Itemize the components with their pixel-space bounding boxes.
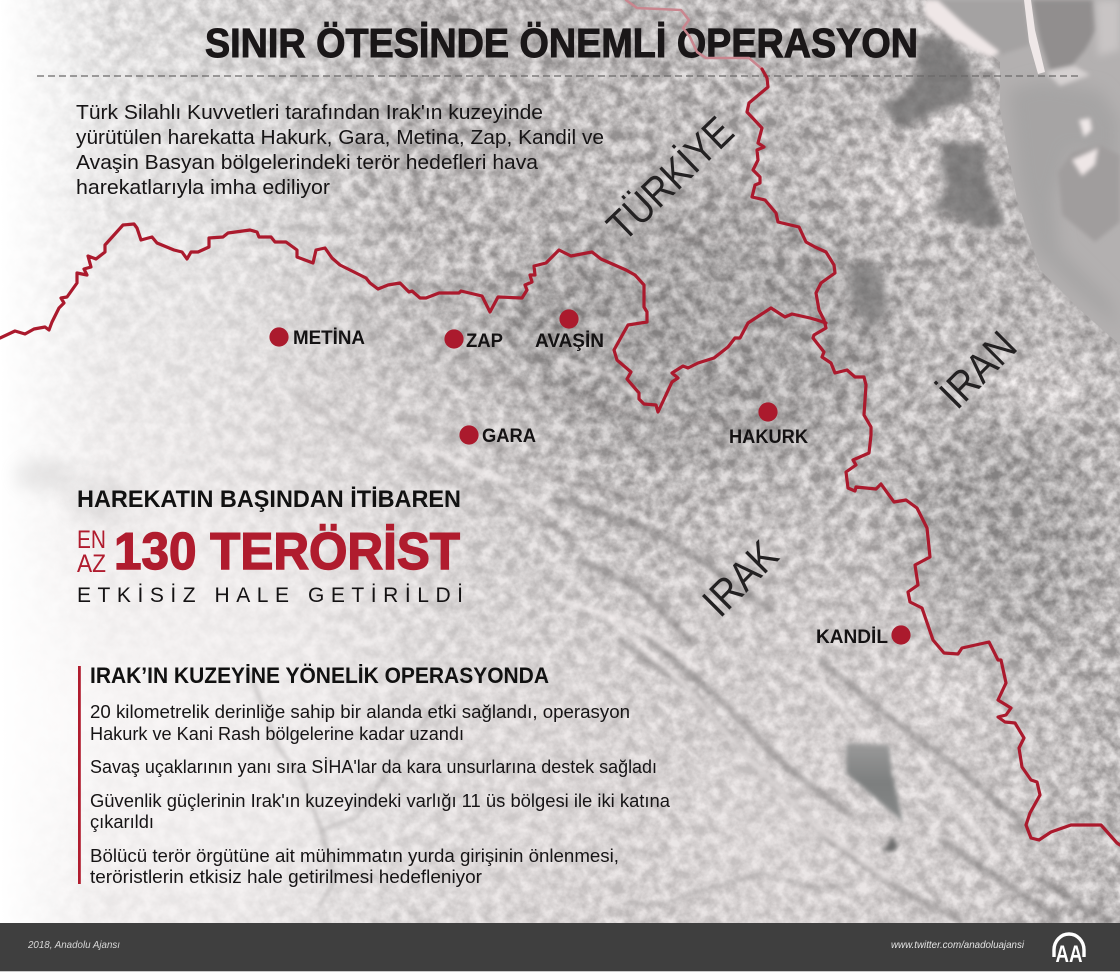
fact 3: Güvenlik güçlerinin Irak'ın kuzeyindeki varlığı 11 üs bölgesi ile iki katına: [90, 791, 671, 811]
en az: AZ: [77, 550, 106, 578]
border: Türkiye-Irak: [0, 224, 826, 412]
footer credit: 2018, Anadolu Ajansı: [27, 939, 120, 951]
marker: Avaşin: AVAŞİN: [535, 331, 604, 352]
big number: 130 TERÖRİST: [114, 523, 460, 581]
marker: Hakurk: [729, 402, 808, 448]
fact 1: 20 kilometrelik derinliğe sahip bir alanda etki sağlandı, operasyon: [90, 702, 630, 722]
dashed divider: [37, 75, 1081, 77]
darker mountain core: [510, 200, 890, 460]
callout: 130 terrorists: [77, 486, 463, 607]
marker: Gara: GARA: [482, 426, 536, 447]
panel: operation facts: [78, 663, 671, 887]
title: SINIR ÖTESİNDE ÖNEMLİ OPERASYON: [205, 20, 918, 66]
marker: Metina: METİNA: [293, 328, 365, 349]
red accent bar: [78, 666, 81, 884]
fact 1: Hakurk ve Kani Rash bölgelerine kadar uzandı: [90, 724, 464, 744]
intro text block: yürütülen harekatta Hakurk, Gara, Metina, Zap, Kandil ve: [76, 127, 604, 149]
footer bar: [0, 923, 1120, 972]
marker: Gara: [459, 425, 536, 447]
callout subline: ETKİSİZ HALE GETİRİLDİ: [77, 584, 463, 607]
en az: [77, 526, 106, 578]
border: Türkiye-İran-Irak: [747, 69, 1120, 845]
country label: Türkiye: TÜRKİYE: [598, 107, 742, 249]
lake Dukan: [846, 743, 903, 822]
sea: [925, 0, 1120, 345]
icon: AA logo: AA: [1056, 941, 1082, 968]
marker: Kandil: KANDİL: [816, 627, 888, 648]
fact 4: Bölücü terör örgütüne ait mühimmatın yurda girişinin önlenmesi,: [90, 846, 619, 866]
icon: AA logo: [1054, 934, 1084, 968]
footer twitter link: www.twitter.com/anadoluajansi: [891, 939, 1025, 951]
intro text block: [76, 102, 604, 199]
facts heading: IRAK’IN KUZEYİNE YÖNELİK OPERASYONDA: [90, 663, 549, 688]
fact 1: [90, 702, 630, 744]
north shore light strip: [925, 0, 1000, 58]
intro text block: harekatlarıyla imha ediliyor: [76, 177, 330, 199]
country label: İran: İRAN: [930, 322, 1026, 417]
fact 4: teröristlerin etkisiz hale getirilmesi hedefleniyor: [90, 867, 482, 887]
en az: EN: [77, 526, 106, 554]
callout heading: HAREKATIN BAŞINDAN İTİBAREN: [77, 486, 461, 513]
lighter terrain: [985, 355, 1095, 415]
faded border under title: [626, 0, 762, 69]
intro text block: Türk Silahlı Kuvvetleri tarafından Irak'ın kuzeyinde: [76, 102, 543, 124]
fact 3: [90, 791, 671, 832]
fact 2: Savaş uçaklarının yanı sıra SİHA'lar da kara unsurlarına destek sağladı: [90, 757, 657, 777]
dark basin: [880, 35, 975, 128]
ridges: [300, 360, 1110, 920]
marker: Hakurk: HAKURK: [729, 427, 808, 448]
island north: [1032, 0, 1096, 70]
marker: Avaşin: [535, 309, 604, 352]
fact 4: [90, 846, 619, 887]
intro text block: Avaşin Basyan bölgelerindeki terör hedefleri hava: [76, 152, 539, 174]
island south: [1058, 145, 1120, 242]
country label: Irak: IRAK: [693, 531, 787, 625]
plateau east of border: [838, 130, 930, 215]
marker: Zap: ZAP: [466, 331, 503, 352]
marker: Zap: [444, 329, 503, 352]
rivers bottom left: [250, 673, 856, 905]
fact 3: çıkarıldı: [90, 812, 154, 832]
